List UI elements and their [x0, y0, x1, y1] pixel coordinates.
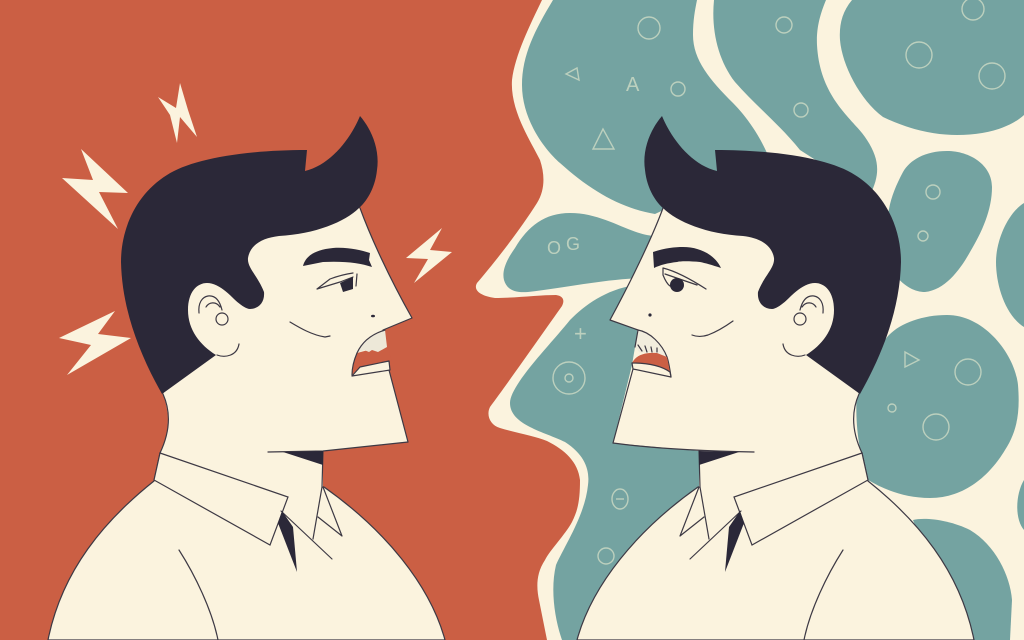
doodle symbols in the blobs: + — [574, 321, 587, 346]
neck shadow — [699, 451, 739, 465]
eyebrow — [303, 248, 372, 267]
blob: right edge — [996, 203, 1024, 327]
cheek line — [692, 321, 733, 336]
blob: top right — [840, 0, 1024, 135]
hair — [644, 116, 901, 394]
cheek line — [290, 322, 330, 337]
blob: top centre — [713, 0, 877, 195]
collar line — [281, 511, 332, 559]
shirt body — [577, 453, 974, 640]
doodle symbols in the blobs: O — [547, 238, 561, 258]
sleeve line — [179, 550, 218, 640]
doodle symbols in the blobs: G — [566, 234, 580, 254]
collar: left flap — [680, 487, 704, 536]
person: left man — [48, 116, 445, 640]
blob: upper left — [522, 0, 770, 214]
necktie — [278, 511, 297, 572]
blob: speech lobe — [503, 213, 655, 292]
panel: red anger side — [0, 0, 580, 640]
head and neck — [610, 208, 862, 539]
doodle symbols in the blobs: A — [626, 74, 640, 96]
head and neck — [160, 208, 412, 539]
mouth — [352, 330, 392, 376]
collar line — [690, 511, 741, 559]
person: right man — [577, 116, 974, 640]
bolt: top — [158, 83, 197, 143]
blob: bottom right — [913, 519, 1012, 640]
hair — [121, 116, 378, 394]
collar: right flap — [734, 453, 868, 545]
panel: teal thought blobs — [503, 0, 1024, 640]
blob: right middle — [888, 151, 992, 292]
face outline — [160, 208, 412, 539]
bolt: left — [62, 149, 128, 229]
nose dot — [371, 315, 375, 317]
bolt: lower left — [59, 311, 131, 375]
nose dot — [648, 313, 652, 317]
collar: left flap — [154, 453, 288, 545]
blob: right edge small — [1017, 480, 1024, 530]
necktie — [725, 511, 744, 572]
shirt body — [48, 453, 445, 640]
doodle symbols in the blobs — [547, 0, 1005, 564]
sleeve line — [804, 550, 843, 640]
bolt: by the nose — [406, 228, 452, 283]
face outline — [610, 208, 862, 539]
ear — [777, 283, 834, 356]
mouth — [632, 330, 671, 377]
eye — [663, 268, 706, 292]
collar: right flap — [318, 487, 342, 536]
icon: lightning bolts — [59, 83, 452, 375]
blob: lower left — [510, 285, 720, 640]
eye — [317, 273, 357, 292]
eyebrow — [653, 247, 721, 268]
neck shadow — [283, 451, 323, 465]
blob: large right — [856, 315, 1019, 498]
ear — [188, 283, 245, 356]
